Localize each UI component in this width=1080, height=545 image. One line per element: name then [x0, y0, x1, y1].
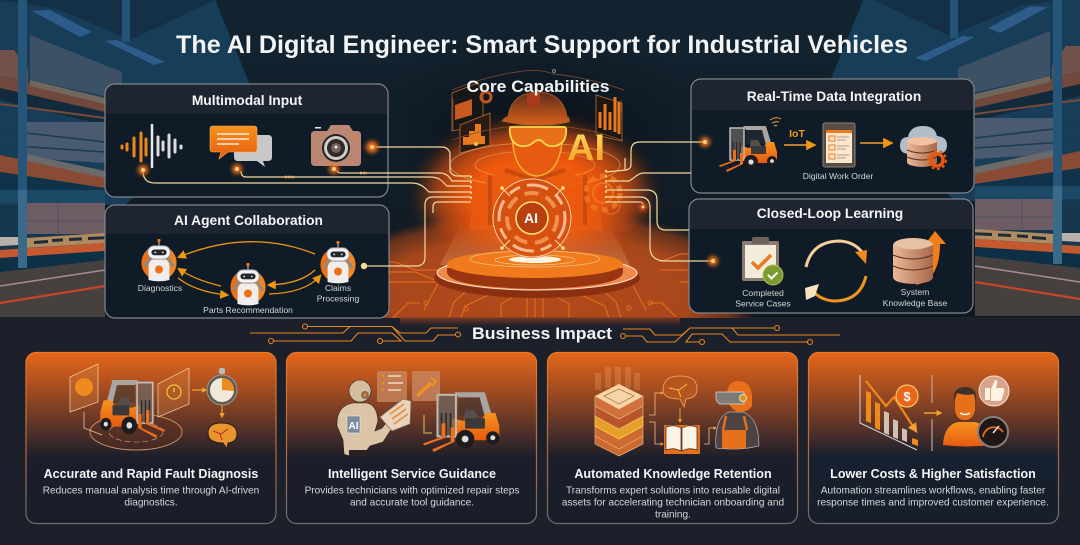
connectors: left panels to engineer	[138, 141, 471, 269]
description: Provides technicians with optimized repair steps	[305, 486, 519, 496]
description: Transforms expert solutions into reusable digital	[566, 486, 780, 496]
label: Digital Work Order	[803, 171, 873, 181]
panel: closed-loop learning: Knowledge Base	[883, 298, 947, 308]
description: diagnostics.	[124, 498, 178, 508]
icon: forklift with wifi	[719, 118, 781, 172]
decorative circuit traces beside heading	[250, 324, 840, 344]
heading: Multimodal Input	[192, 93, 303, 108]
description: Reduces manual analysis time through AI-driven	[43, 486, 259, 496]
icon: audio waveform	[122, 125, 181, 167]
heading: Automated Knowledge Retention	[574, 467, 772, 481]
connectors: right panels to engineer	[606, 137, 718, 266]
AI core ring	[492, 178, 572, 258]
panel: closed-loop learning: System	[901, 287, 929, 297]
description: Automation streamlines workflows, enabling faster	[821, 486, 1046, 496]
illustration	[860, 375, 1009, 451]
panel: AI agent collaboration: Processing	[317, 294, 359, 304]
holographic dashboards	[450, 70, 624, 187]
heading: Real-Time Data Integration	[747, 89, 921, 104]
heading: Intelligent Service Guidance	[328, 467, 496, 481]
icon: claims processing robot	[320, 241, 356, 283]
icon: diagnostics robot	[141, 239, 177, 281]
central illustration: AI digital engineer hologram	[382, 69, 754, 325]
icon: knowledge base with growth arrow	[893, 231, 946, 285]
description: training.	[655, 510, 691, 520]
AI core ring: AI	[524, 210, 538, 226]
arrow	[784, 144, 814, 146]
panel: AI agent collaboration	[105, 205, 389, 318]
description	[43, 486, 259, 508]
heading: Closed-Loop Learning	[757, 206, 903, 221]
icon: camera	[311, 125, 361, 166]
illustration	[595, 367, 759, 456]
icon: parts recommendation robot	[230, 263, 266, 305]
icon: digital work order tablet	[823, 123, 855, 167]
heading: business impact: Business Impact	[472, 325, 613, 343]
icon: chat bubbles	[210, 126, 272, 167]
illustration: AI	[348, 421, 359, 432]
description	[562, 486, 784, 520]
icon: loop arrows	[805, 241, 867, 301]
card: automated knowledge retention	[548, 352, 798, 524]
heading: core capabilities: Core Capabilities	[466, 77, 610, 96]
icon: cloud database with gear	[900, 126, 947, 169]
illustration: $	[903, 389, 911, 404]
illustration	[70, 364, 237, 450]
icon: completed clipboard	[742, 237, 783, 285]
floor circuit glow	[382, 220, 754, 318]
panel: closed-loop learning: Service Cases	[735, 298, 791, 308]
IoT label: IoT	[789, 128, 805, 140]
card: intelligent service guidance	[286, 352, 536, 524]
heading: Accurate and Rapid Fault Diagnosis	[44, 467, 258, 481]
agent flow arrows	[178, 242, 320, 295]
panel: AI agent collaboration: Parts Recommendation	[203, 305, 293, 315]
card: lower costs and higher satisfaction	[808, 352, 1058, 524]
panel: multimodal input	[105, 84, 388, 197]
panel: AI agent collaboration: Claims	[325, 283, 351, 293]
gear	[586, 176, 620, 214]
illustration	[337, 371, 499, 456]
description: assets for accelerating technician onboarding and	[562, 498, 784, 508]
labels: Completed	[742, 288, 784, 298]
light beams	[440, 225, 630, 265]
heading: Lower Costs & Higher Satisfaction	[830, 467, 1036, 481]
heading: AI Agent Collaboration	[174, 213, 323, 228]
description: response times and improved customer experience.	[817, 498, 1049, 508]
description	[305, 486, 519, 508]
description: and accurate tool guidance.	[350, 498, 474, 508]
engineer figure with hard hat and goggles	[470, 92, 602, 230]
arrow	[860, 142, 891, 144]
platform	[434, 250, 640, 298]
card: accurate and rapid fault diagnosis	[26, 352, 276, 524]
orange radial glow	[415, 119, 655, 271]
fade of the orange floor into the lower band	[400, 317, 680, 326]
panel: closed-loop learning	[689, 199, 973, 313]
title: The AI Digital Engineer: Smart Support for Industrial Vehicles	[176, 31, 908, 59]
panel: real-time data integration	[691, 79, 974, 193]
holographic AI letters: AI	[567, 127, 605, 168]
description	[817, 486, 1049, 508]
agent labels: Diagnostics	[138, 283, 182, 293]
